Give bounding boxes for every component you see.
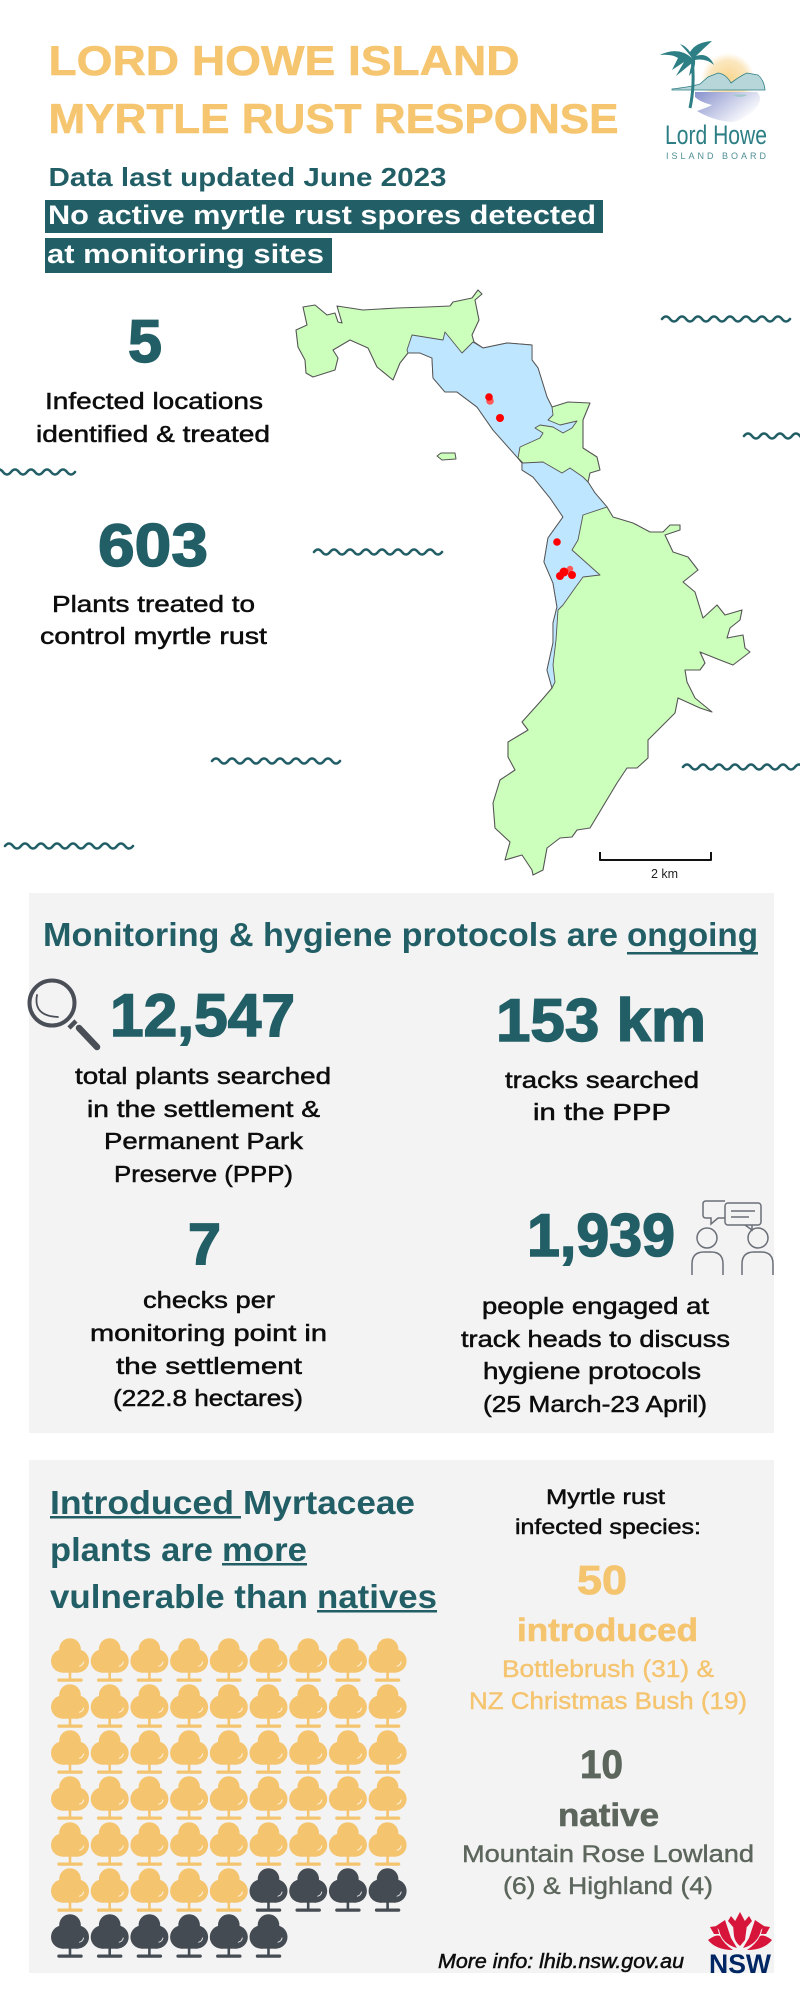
- stat: plants treated: 603: [98, 512, 208, 579]
- scale bar: [600, 852, 711, 881]
- infected species heading: [515, 1486, 701, 1539]
- logo: Lord Howe Island Board: ISLAND BOARD: [666, 151, 766, 161]
- stat: infected locations: Infected locations: [45, 388, 263, 414]
- settlement area in blue: [407, 332, 607, 688]
- stat: people engaged: (25 March-23 April): [483, 1391, 707, 1417]
- stat: infected locations: identified & treated: [36, 421, 270, 447]
- stat: introduced species: NZ Christmas Bush (19): [469, 1688, 747, 1715]
- logo: Lord Howe Island Board: Lord Howe: [665, 120, 767, 150]
- stat: infected locations: [36, 308, 270, 447]
- stat: checks per monitoring point: checks per: [143, 1287, 275, 1313]
- panel heading: natives: [317, 1578, 437, 1615]
- stat: plants searched: Permanent Park: [104, 1128, 304, 1154]
- icon: magnifying glass: [30, 980, 97, 1047]
- stat: tracks searched: [496, 987, 706, 1125]
- panel heading: Myrtaceae: [243, 1484, 415, 1521]
- stat: tracks searched: tracks searched: [505, 1067, 699, 1093]
- stat: checks per monitoring point: the settlement: [116, 1353, 303, 1379]
- stat: introduced species: Bottlebrush (31) &: [502, 1656, 714, 1683]
- panel heading: Introduced: [50, 1484, 234, 1521]
- stat: tracks searched: in the PPP: [533, 1099, 671, 1125]
- stat: native species: native: [558, 1797, 659, 1833]
- stat: people engaged: 1,939: [527, 1202, 675, 1269]
- icon: two people talking: [692, 1201, 773, 1275]
- panel heading: [50, 1484, 437, 1615]
- infected species heading: Myrtle rust: [546, 1486, 665, 1509]
- stat: people engaged: track heads to discuss: [461, 1326, 730, 1352]
- logo: NSW Government waratah: [708, 1912, 772, 1979]
- panel heading: vulnerable than: [50, 1578, 308, 1615]
- logo: NSW Government waratah: NSW: [709, 1949, 771, 1979]
- title: [48, 37, 618, 142]
- stat: checks per monitoring point: (222.8 hectares): [113, 1385, 303, 1411]
- panel heading: plants are: [50, 1531, 213, 1568]
- data date subheading: Data last updated June 2023: [48, 162, 446, 192]
- stat: plants treated: [40, 512, 268, 649]
- stat: native species: [462, 1743, 754, 1900]
- highlighted status statement: at monitoring sites: [47, 239, 324, 269]
- stat: native species: 10: [580, 1743, 623, 1787]
- logo: Lord Howe Island Board: [660, 41, 767, 161]
- stat: native species: (6) & Highland (4): [503, 1873, 713, 1900]
- stat: plants searched: in the settlement &: [87, 1096, 320, 1122]
- stat: people engaged: [461, 1202, 730, 1417]
- stat: plants searched: total plants searched: [75, 1063, 331, 1089]
- stat: checks per monitoring point: [90, 1212, 327, 1411]
- stat: infected locations: 5: [128, 308, 162, 375]
- decorative waves: [0, 316, 800, 848]
- stat: checks per monitoring point: 7: [188, 1212, 221, 1277]
- panel: introduced vs native species: [29, 1460, 774, 1979]
- infected location markers: [485, 393, 576, 580]
- highlighted status statement: No active myrtle rust spores detected: [48, 200, 596, 230]
- infected species heading: infected species:: [515, 1516, 701, 1539]
- stat: plants treated: control myrtle rust: [40, 623, 268, 649]
- highlighted status statement: [45, 200, 603, 273]
- title: LORD HOWE ISLAND: [48, 37, 520, 84]
- stat: introduced species: [469, 1557, 747, 1715]
- map of Lord Howe Island: [296, 290, 750, 881]
- pictogram: 10 native trees: [51, 1868, 407, 1958]
- stat: plants treated: Plants treated to: [52, 591, 255, 617]
- small islet: [437, 453, 456, 460]
- island outline, green park preserve: [296, 290, 750, 875]
- stat: plants searched: [75, 982, 331, 1187]
- stat: people engaged: people engaged at: [482, 1293, 710, 1319]
- pictogram: 50 introduced trees: [51, 1638, 407, 1912]
- stat: plants searched: Preserve (PPP): [114, 1161, 293, 1187]
- stat: checks per monitoring point: monitoring point in: [90, 1320, 327, 1346]
- stat: plants searched: 12,547: [110, 982, 295, 1049]
- panel heading: ongoing: [627, 916, 758, 953]
- title: MYRTLE RUST RESPONSE: [48, 95, 618, 142]
- stat: people engaged: hygiene protocols: [483, 1358, 701, 1384]
- scale bar: 2 km: [651, 867, 678, 881]
- stat: introduced species: 50: [577, 1557, 627, 1603]
- stat: native species: Mountain Rose Lowland: [462, 1841, 754, 1868]
- panel: monitoring and hygiene protocols: [29, 893, 774, 1433]
- more info link: More info: lhib.nsw.gov.au: [438, 1951, 684, 1973]
- panel heading: more: [222, 1531, 307, 1568]
- stat: introduced species: introduced: [517, 1612, 698, 1648]
- panel heading: Monitoring & hygiene protocols are: [43, 916, 618, 953]
- stat: tracks searched: 153 km: [496, 987, 706, 1054]
